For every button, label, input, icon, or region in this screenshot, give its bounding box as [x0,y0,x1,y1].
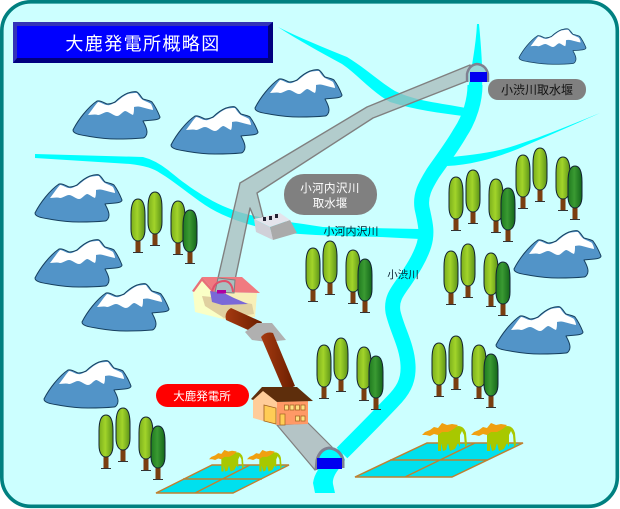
power station cutaway [192,277,262,334]
river: Koawauchizawa [35,154,420,239]
trees [99,148,582,480]
weir: Koawauchizawa intake [254,213,297,240]
outlet tunnel [316,448,343,470]
label: Koshibu intake [488,79,586,100]
intake: Koshibu river [467,64,488,82]
label: Koshibu river: 小渋川 [387,268,419,281]
rice paddy: right [355,423,523,477]
label: Koawauchizawa intake: 取水堰 [313,197,348,210]
rice paddy: left [156,450,289,493]
penstock block [245,323,286,342]
mountains [35,29,601,408]
river: Koshibu main stream [313,24,482,493]
title banner [13,22,273,63]
lower power house [251,387,313,425]
label: Oshika power station: 大鹿発電所 [173,389,231,403]
river: upper tributary [278,27,466,116]
label: Koawauchizawa river: 小河内沢川 [324,224,378,238]
river: right tributary [447,113,600,166]
title banner: 大鹿発電所概略図 [65,34,221,54]
label: Koawauchizawa intake [284,174,377,215]
label: Koshibu intake: 小渋川取水堰 [501,83,573,97]
penstock [261,332,295,391]
label: Oshika power station [156,384,249,407]
waterway: lower tailrace [277,423,332,470]
waterway: upper tunnel [218,65,470,280]
label: Koawauchizawa intake: 小河内沢川 [300,181,360,195]
